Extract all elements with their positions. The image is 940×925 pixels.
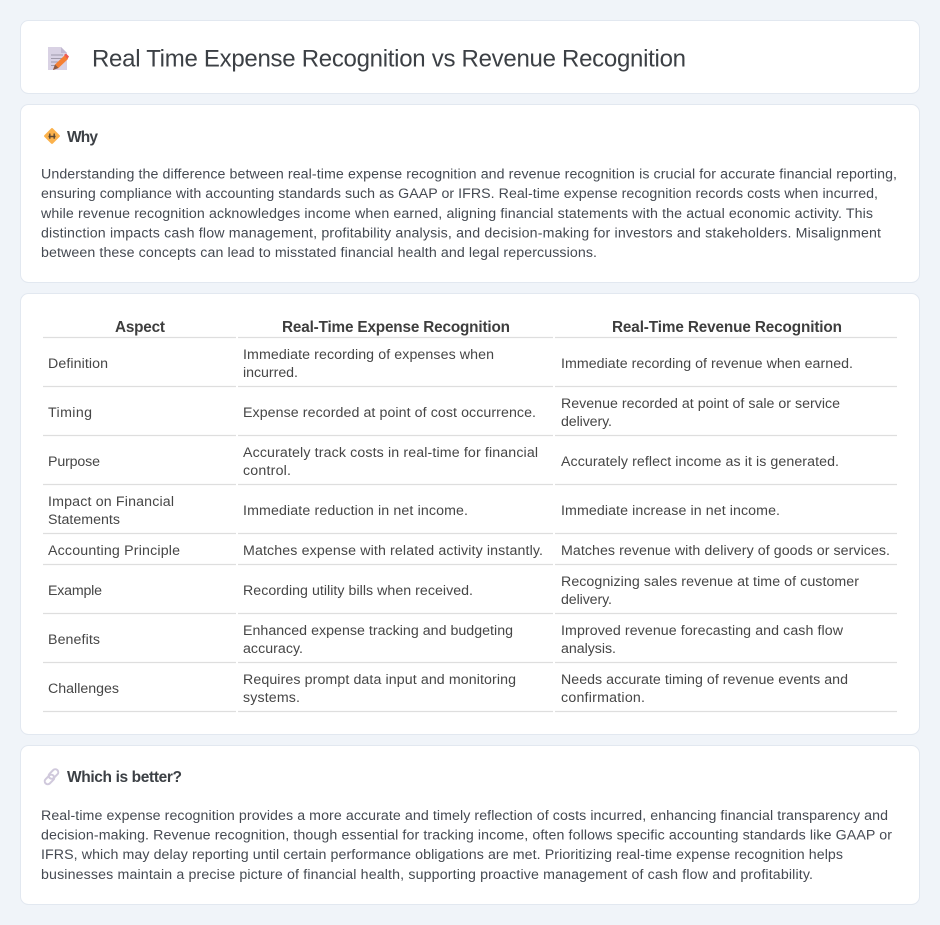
why paragraph bbox=[40, 167, 897, 261]
table header row bbox=[115, 319, 842, 336]
table header row: Aspect bbox=[115, 319, 165, 336]
row: definition bbox=[48, 347, 853, 381]
why paragraph: while revenue recognition acknowledges income when earned, aligning financial statements with the actual economic activity. This bbox=[40, 206, 873, 222]
table header row: Real-Time Revenue Recognition bbox=[612, 319, 842, 336]
row: purpose: control. bbox=[243, 463, 291, 479]
which is better paragraph: decision-making. Revenue recognition, though essential for tracking income, often follows specific accounting standards like GAAP or bbox=[41, 828, 892, 844]
heading: why: Why bbox=[67, 129, 98, 146]
row: definition: incurred. bbox=[243, 365, 298, 381]
row: timing: Timing bbox=[48, 405, 92, 421]
panel: why bbox=[20, 104, 920, 282]
row: accounting principle: Matches expense with related activity instantly. bbox=[243, 543, 543, 559]
which is better paragraph: Real-time expense recognition provides a more accurate and timely reflection of costs incurred, enhancing financial transparency and bbox=[41, 808, 888, 824]
row: benefits: analysis. bbox=[561, 641, 616, 657]
row: challenges bbox=[48, 672, 848, 706]
row: timing: delivery. bbox=[561, 414, 612, 430]
row: purpose: Accurately reflect income as it is generated. bbox=[561, 454, 839, 470]
row: challenges: Requires prompt data input and monitoring bbox=[243, 672, 516, 688]
row: timing bbox=[48, 396, 840, 430]
row: example: Recording utility bills when received. bbox=[243, 583, 473, 599]
row: accounting principle: Accounting Principle bbox=[48, 543, 180, 559]
row: accounting principle bbox=[48, 543, 890, 559]
why paragraph: Understanding the difference between real-time expense recognition and revenue recognition is crucial for accurate financial reporting, bbox=[41, 167, 897, 183]
row: example: Example bbox=[48, 583, 102, 599]
panel: comparison table bbox=[20, 294, 920, 734]
row: impact on financial statements: Statements bbox=[48, 512, 120, 528]
row: example: delivery. bbox=[561, 592, 612, 608]
which is better paragraph: IFRS, which may delay reporting until certain performance obligations are met. Prioritizing real-time expense recognition helps bbox=[41, 847, 843, 863]
why paragraph: between these concepts can lead to misstated financial health and legal repercussions. bbox=[41, 245, 597, 261]
row: definition: Immediate recording of expenses when bbox=[243, 347, 494, 363]
row: timing: Revenue recorded at point of sale or service bbox=[561, 396, 840, 412]
row: challenges: confirmation. bbox=[561, 690, 645, 706]
row: purpose: Purpose bbox=[48, 454, 100, 470]
row: benefits: Enhanced expense tracking and budgeting bbox=[243, 623, 513, 639]
panel: which is better bbox=[20, 746, 920, 904]
row: challenges: systems. bbox=[243, 690, 300, 706]
row: benefits bbox=[48, 623, 844, 657]
row: challenges: Challenges bbox=[48, 681, 119, 697]
row: benefits: accuracy. bbox=[243, 641, 303, 657]
row: definition: Definition bbox=[48, 356, 108, 372]
row: benefits: Benefits bbox=[48, 632, 100, 648]
row: example: Recognizing sales revenue at time of customer bbox=[561, 574, 859, 590]
row: impact on financial statements: Immediate increase in net income. bbox=[561, 503, 780, 519]
icon: warning diamond bbox=[44, 128, 60, 144]
row: example bbox=[48, 574, 859, 608]
row: accounting principle: Matches revenue with delivery of goods or services. bbox=[561, 543, 890, 559]
why paragraph: ensuring compliance with accounting standards such as GAAP or IFRS. Real-time expense recognition records costs when incurred, bbox=[41, 186, 878, 202]
icon: chain link bbox=[43, 768, 60, 786]
row: impact on financial statements: Impact on Financial bbox=[48, 494, 174, 510]
icon: document with pencil bbox=[48, 47, 69, 70]
which is better paragraph: businesses maintain a precise picture of financial health, supporting proactive management of cash flow and profitability. bbox=[41, 867, 813, 883]
row: definition: Immediate recording of revenue when earned. bbox=[561, 356, 853, 372]
row: benefits: Improved revenue forecasting and cash flow bbox=[561, 623, 844, 639]
row: timing: Expense recorded at point of cost occurrence. bbox=[243, 405, 536, 421]
which is better paragraph bbox=[41, 808, 892, 883]
row: purpose: Accurately track costs in real-time for financial bbox=[243, 445, 538, 461]
why paragraph: distinction impacts cash flow management, profitability analysis, and decision-making for investors and stakeholders. Misalignment bbox=[41, 225, 881, 241]
title: Real Time Expense Recognition vs Revenue Recognition bbox=[92, 46, 686, 72]
heading: which is better: Which is better? bbox=[67, 769, 182, 786]
row: challenges: Needs accurate timing of revenue events and bbox=[561, 672, 848, 688]
row: impact on financial statements bbox=[48, 494, 780, 528]
row: impact on financial statements: Immediate reduction in net income. bbox=[243, 503, 468, 519]
row: purpose bbox=[48, 445, 839, 479]
panel: header bbox=[20, 20, 920, 94]
table header row: Real-Time Expense Recognition bbox=[282, 319, 510, 336]
